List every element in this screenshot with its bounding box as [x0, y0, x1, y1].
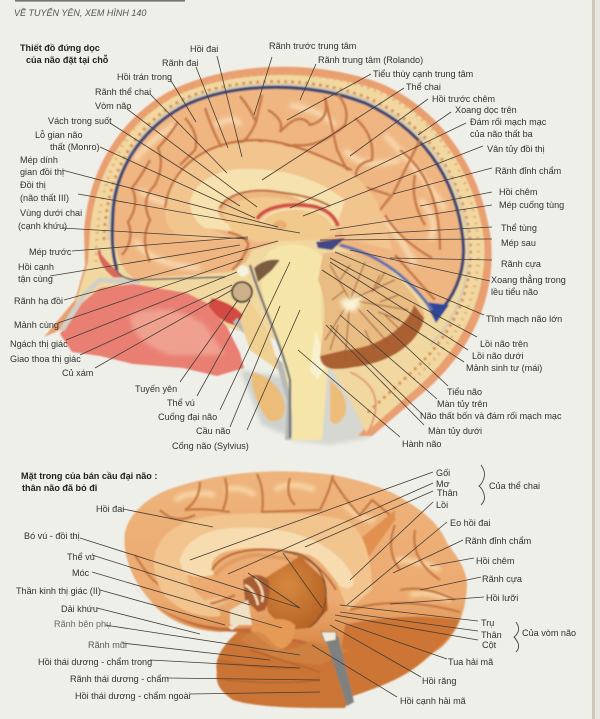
- label: Tuyến yên: Tuyến yên: [135, 384, 177, 394]
- label: Vách trong suốt: Vách trong suốt: [48, 116, 112, 126]
- label: Hồi cạnh tận cùng: Hồi cạnh: [18, 262, 54, 272]
- heading: sagittal section: [20, 43, 109, 65]
- label: Mép trước: Mép trước: [29, 247, 72, 257]
- cerebellum: [318, 252, 425, 369]
- label: Rãnh bên phụ: [54, 619, 300, 655]
- label: Thể vú: Thể vú: [167, 398, 195, 408]
- label: Thân: Thân: [437, 488, 458, 498]
- label: Mảnh cùng: [14, 259, 243, 330]
- label: Rãnh đỉnh chẩm: Rãnh đỉnh chẩm: [495, 166, 561, 176]
- illustration: medial hemisphere: [124, 471, 467, 708]
- label: Dải khứu: [61, 604, 200, 634]
- label: Tua hải mã: [335, 620, 494, 667]
- label: Móc: Móc: [72, 568, 90, 578]
- neck pale region: [290, 345, 420, 445]
- label: Hồi cạnh tận cùng: [18, 245, 240, 284]
- label: Hồi trước chêm: Hồi trước chêm: [432, 94, 495, 104]
- label: Rãnh đỉnh chẩm: [393, 536, 531, 573]
- label: Rãnh đai: [162, 58, 228, 148]
- label: Hồi cạnh hải mã: [312, 645, 467, 706]
- label: Tuyến yên: [135, 300, 238, 394]
- label: Cột: Cột: [482, 640, 497, 650]
- label: Rãnh bên phụ: Rãnh bên phụ: [54, 619, 111, 629]
- label: Mép trước: [29, 237, 248, 257]
- label: Rãnh trung tâm: Rãnh trung tâm (Rolando): [318, 55, 423, 65]
- label: Lồi não dưới: Lồi não dưới: [472, 351, 524, 361]
- label: Tiểu não: Tiểu não: [447, 387, 482, 397]
- labels: left side of medial surface: [16, 504, 322, 701]
- label: Vòm não: Vòm não: [95, 101, 131, 111]
- label: Hành não: Hành não: [402, 439, 441, 449]
- fornix and mamillary: [243, 575, 269, 612]
- scalp: [44, 67, 492, 436]
- label: Rãnh trước trung tâm: [254, 41, 356, 115]
- cingulate gyrus: [154, 513, 372, 617]
- label: Hồi răng: [330, 625, 456, 686]
- label: Thể chai: [262, 82, 441, 180]
- label: Giao thoa thị giác: [10, 285, 232, 364]
- label: Lỗ gian não thất: [35, 130, 255, 218]
- label: Hồi răng: Hồi răng: [422, 676, 456, 686]
- label: Rãnh mũi: [88, 640, 270, 660]
- label: Rãnh hạ đồi: Rãnh hạ đồi: [14, 296, 63, 306]
- heading: medial surface: thân não đã bỏ đi: [22, 483, 97, 493]
- label: Rãnh cựa: [420, 574, 523, 590]
- label: Lồi: [350, 500, 448, 580]
- label: Rãnh trước trung tâm: Rãnh trước trung tâm: [269, 41, 356, 51]
- dura and sinus: [112, 87, 464, 316]
- label: Giao thoa thị giác: Giao thoa thị giác: [10, 354, 81, 364]
- label: Vùng dưới chai: (cạnh khứu): [18, 221, 67, 231]
- label: Thân vòm: Thân: [481, 630, 502, 640]
- labels: right side of medial surface: [190, 465, 576, 706]
- label: Hồi đai: [190, 44, 242, 157]
- brace: Của vòm não: [514, 622, 576, 652]
- label: Hồi lưỡi: [390, 593, 518, 604]
- label: Tĩnh mạch não lớn: Tĩnh mạch não lớn: [486, 314, 562, 324]
- label: Màn tủy trên: Màn tủy trên: [437, 399, 488, 409]
- label: Xoang thẳng trong lều tiểu não: Xoang thẳng trong: [491, 274, 566, 285]
- label: Hồi thái dương - chẩm trong: [38, 657, 300, 668]
- label: Hồi đai: Hồi đai: [96, 504, 124, 514]
- nasal cavity: [60, 284, 244, 376]
- label: Lồi não trên: Lồi não trên: [480, 339, 528, 349]
- label: Xoang dọc trên: Xoang dọc trên: [455, 105, 517, 115]
- corpus callosum: [190, 169, 345, 232]
- label: Mảnh cùng: Mảnh cùng: [14, 320, 59, 330]
- label: Cống não: [172, 310, 300, 451]
- label: Hồi đai: Hồi đai: [190, 44, 218, 54]
- label: Vân tủy đồi thị: [303, 144, 545, 216]
- label: Eo hồi đai: [347, 518, 490, 605]
- label: Hồi trán trong: [117, 72, 196, 122]
- illustration: head and brain section: [44, 67, 492, 445]
- label: Rãnh đỉnh chẩm: Rãnh đỉnh chẩm: [465, 536, 531, 546]
- heading: sagittal section: của não đặt tại chỗ: [26, 55, 109, 65]
- darker occipito-temporal region: [340, 617, 460, 697]
- label: Hồi cạnh hải mã: Hồi cạnh hải mã: [400, 696, 467, 706]
- label: Gối: [190, 468, 450, 560]
- label: Thể vú: [67, 552, 250, 605]
- label: Mép sau: Mép sau: [501, 238, 536, 248]
- labels: left side of sagittal section: [10, 44, 300, 451]
- label: Cầu não: Cầu não: [196, 426, 230, 436]
- label: Vùng dưới chai: [18, 208, 248, 239]
- label: Rãnh cựa: Rãnh cựa: [482, 574, 523, 584]
- label: Đám rối mạch mạc của não thất ba: Đám rối mạch mạc: [470, 117, 547, 127]
- label: Vòm não: [95, 101, 257, 207]
- label: Mép cuống tùng: Mép cuống tùng: [499, 200, 564, 210]
- label: Gối: Gối: [436, 468, 450, 478]
- label: Thể vú: Thể vú: [67, 552, 95, 562]
- spinal vertebrae: [330, 380, 346, 424]
- label: Dải khứu: Dải khứu: [61, 604, 98, 614]
- label: Đồi thị: (não thất III): [20, 193, 69, 203]
- label: Lồi não trên: [330, 258, 528, 349]
- label: Tiểu thùy cạnh trung tâm: Tiểu thùy cạnh trung tâm: [373, 69, 473, 79]
- label: Não thất bốn: Não thất bốn và đám rối mạch mạc: [420, 411, 562, 421]
- page note: VỀ TUYẾN YÊN, XEM HÌNH 140: [14, 7, 146, 18]
- label: Mơ: Mơ: [436, 479, 450, 489]
- label: Màn tủy trên: [340, 315, 488, 409]
- label: Cột: [335, 615, 497, 650]
- heading: medial surface: Mặt trong của bán cầu đại não :: [21, 471, 157, 481]
- label: Mảnh sinh tư: [322, 270, 542, 373]
- label: Đám rối mạch mạc của não thất ba: [290, 117, 547, 208]
- label: Hồi chêm: Hồi chêm: [499, 187, 537, 197]
- brace: Của thể chai: Của thể chai: [489, 481, 540, 491]
- heading: medial surface: [21, 471, 157, 493]
- label: Rãnh trung tâm: [300, 55, 423, 100]
- corpus callosum: [180, 528, 354, 588]
- hemisphere mass: [124, 471, 467, 708]
- label: Rãnh thể chai: [95, 87, 227, 173]
- cerebrum mass: [113, 88, 463, 316]
- label: Ngách thị giác: [10, 272, 237, 349]
- label: Thể chai: Thể chai: [406, 82, 441, 92]
- label: Đám rối mạch mạc của não thất ba: của não thất ba: [470, 129, 534, 139]
- label: Trụ: Trụ: [481, 618, 494, 628]
- label: Đồi thị: Đồi thị: [20, 180, 46, 190]
- label: Tiểu thùy cạnh trung tâm: [287, 69, 473, 120]
- label: Hồi lưỡi: Hồi lưỡi: [486, 593, 518, 603]
- label: Tua hải mã: Tua hải mã: [448, 657, 494, 667]
- label: Mép dính gian đồi thị: Mép dính: [20, 155, 58, 165]
- tentorial strip: [325, 636, 354, 706]
- pituitary: [232, 282, 252, 302]
- label: Bó vú - đồi thị: [24, 531, 300, 608]
- thalamus cut: [262, 556, 328, 630]
- label: Tĩnh mạch não lớn: [335, 252, 562, 324]
- gyri highlights: [165, 485, 450, 603]
- label: Vách trong suốt: [48, 116, 240, 206]
- label: Đồi thị: [20, 180, 300, 233]
- label: Ngách thị giác: Ngách thị giác: [10, 339, 68, 349]
- label: Rãnh thể chai: Rãnh thể chai: [95, 87, 151, 97]
- label: Thể vú: [167, 300, 250, 408]
- label: Cống não: Cống não (Sylvius): [172, 441, 249, 451]
- uncus: [250, 619, 295, 650]
- label: Mép cuống tùng: [330, 200, 564, 230]
- label: Hồi chêm: [430, 556, 514, 566]
- grey strip skull base: [62, 280, 140, 330]
- label: Bó vú - đồi thị: Bó vú - đồi thị: [24, 531, 80, 541]
- label: Lỗ gian não thất: Lỗ gian não: [35, 130, 83, 140]
- label: Mơ: [228, 479, 450, 574]
- label: Lồi não dưới: [330, 262, 524, 361]
- panel: medial surface of the hemisphere: [16, 465, 576, 708]
- leader: inner fibres: [248, 553, 322, 608]
- label: Vùng dưới chai: Vùng dưới chai: [20, 208, 82, 218]
- label: Tiểu não: [367, 310, 482, 397]
- gyri highlights: [135, 105, 445, 268]
- gyri outline: [122, 95, 440, 300]
- label: Xoang thẳng trong lều tiểu não: [350, 250, 566, 297]
- label: Hành não: [298, 350, 441, 449]
- label: Thân: [305, 488, 458, 547]
- label: Xoang dọc trên: [418, 105, 517, 135]
- label: Hồi thái dương - chẩm trong: Hồi thái dương - chẩm trong: [38, 657, 152, 667]
- label: Rãnh thái dương - chẩm: Rãnh thái dương - chẩm: [70, 674, 169, 684]
- label: Hồi trán trong: Hồi trán trong: [117, 72, 172, 82]
- brace: Của thể chai: [479, 465, 540, 505]
- label: Lỗ gian não thất: thất (Monro): [50, 142, 100, 152]
- label: Trụ: [340, 605, 494, 628]
- label: Hồi thái dương - chẩm ngoài: Hồi thái dương - chẩm ngoài: [75, 691, 191, 701]
- label: Hồi chêm: [420, 187, 537, 206]
- cingulate gyrus: [165, 142, 392, 250]
- label: Rãnh đai: Rãnh đai: [162, 58, 198, 68]
- label: Củ xám: Củ xám: [62, 368, 93, 378]
- label: Hồi cạnh tận cùng: tận cùng: [18, 274, 53, 284]
- label: Hồi trước chêm: [350, 94, 495, 156]
- label: Mép dính gian đồi thị: [20, 155, 278, 227]
- label: Não thất bốn: [330, 325, 562, 421]
- label: Móc: [72, 568, 282, 628]
- label: Rãnh hạ đồi: [14, 241, 278, 306]
- label: Thần kinh thị giác: Thần kinh thị giác (II): [16, 586, 101, 596]
- label: Rãnh đỉnh chẩm: [393, 166, 561, 194]
- brace: Của vòm não: Của vòm não: [522, 628, 576, 638]
- label: Màn tủy dưới: Màn tủy dưới: [428, 426, 482, 436]
- label: Vân tủy đồi thị: Vân tủy đồi thị: [487, 144, 545, 154]
- label: Thần kinh thị giác: [16, 586, 225, 625]
- label: Màn tủy dưới: [326, 325, 482, 436]
- label: Thể tùng: [335, 223, 537, 236]
- panel: sagittal section of the brain: [10, 41, 566, 451]
- label: Hồi chêm: Hồi chêm: [476, 556, 514, 566]
- label: Thân vòm: [340, 612, 502, 640]
- brain stem: [262, 245, 328, 440]
- label: Xoang thẳng trong lều tiểu não: lều tiểu não: [491, 287, 538, 297]
- label: Eo hồi đai: Eo hồi đai: [450, 518, 490, 528]
- label: Lồi: Lồi: [436, 500, 448, 510]
- label: Mảnh sinh tư: Mảnh sinh tư (mái): [466, 363, 542, 373]
- label: Mép dính gian đồi thị: gian đồi thị: [20, 167, 64, 177]
- label: Cuống đại não: [158, 262, 290, 422]
- skull bone: [75, 75, 484, 432]
- label: Cuống đại não: Cuống đại não: [158, 412, 217, 422]
- label: Rãnh cựa: Rãnh cựa: [501, 259, 542, 269]
- label: Cầu não: [196, 306, 280, 436]
- label: Rãnh mũi: Rãnh mũi: [88, 640, 127, 650]
- gyri outline: [135, 474, 460, 612]
- heading: sagittal section: Thiết đồ đứng dọc: [20, 43, 100, 53]
- label: Hồi đai: [96, 504, 213, 527]
- label: Thể tùng: Thể tùng: [501, 223, 537, 233]
- label: Củ xám: [62, 290, 232, 378]
- labels: right side of sagittal section: [254, 41, 566, 449]
- septum and thalamus: [222, 197, 340, 242]
